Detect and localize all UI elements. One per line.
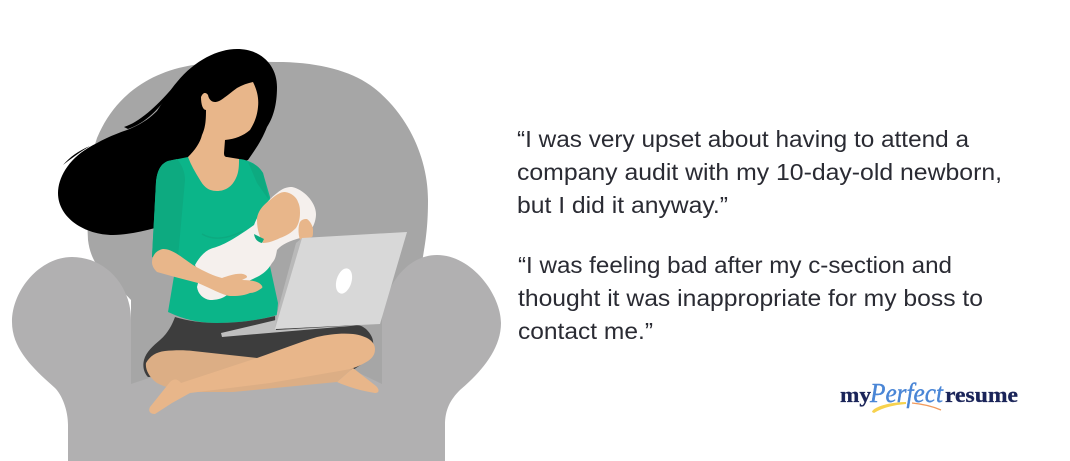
shirt chest fold — [202, 231, 243, 238]
face, neck and chest — [188, 82, 258, 191]
baby blanket — [195, 187, 316, 300]
quote 1: company audit with my 10-day-old newborn, — [517, 159, 1002, 185]
logo: myPerfectResume: resume — [945, 382, 1018, 407]
laptop edge — [275, 238, 302, 329]
armchair arms and seat — [12, 255, 501, 461]
hair — [58, 49, 277, 235]
laptop logo — [333, 266, 355, 296]
logo wordmark: my — [840, 382, 871, 407]
illustration: mother with newborn and laptop in armchair — [12, 49, 501, 461]
stray hair wisp, upper — [124, 85, 175, 129]
logo: myPerfectResume: Perfect — [869, 378, 944, 408]
front leg and foot — [149, 334, 375, 414]
quote 2: “I was feeling bad after my c-section and — [518, 252, 952, 278]
mother's supporting hand — [298, 219, 313, 240]
quote 2: contact me.” — [518, 318, 653, 344]
back leg — [146, 350, 353, 392]
quote 1: but I did it anyway.” — [517, 192, 728, 218]
quote 2 — [518, 252, 983, 344]
shirt sleeve shading — [152, 159, 185, 257]
green shirt glimpse near baby — [254, 234, 264, 243]
shirt — [152, 157, 278, 323]
armchair back — [87, 62, 428, 390]
laptop lid — [275, 232, 407, 329]
quote 1 — [517, 126, 1002, 218]
shorts — [143, 316, 373, 377]
stray hair wisp, lower — [63, 146, 90, 165]
laptop base — [221, 320, 362, 337]
quote 1: “I was very upset about having to attend a — [517, 126, 970, 152]
mother's arm and hand — [152, 249, 262, 296]
baby head — [257, 192, 300, 243]
logo: myPerfectResume — [840, 378, 1018, 413]
logo swoosh — [872, 402, 906, 413]
shirt shoulder shading — [248, 162, 269, 200]
quote 2: thought it was inappropriate for my boss to — [518, 285, 983, 311]
far foot — [337, 368, 379, 393]
